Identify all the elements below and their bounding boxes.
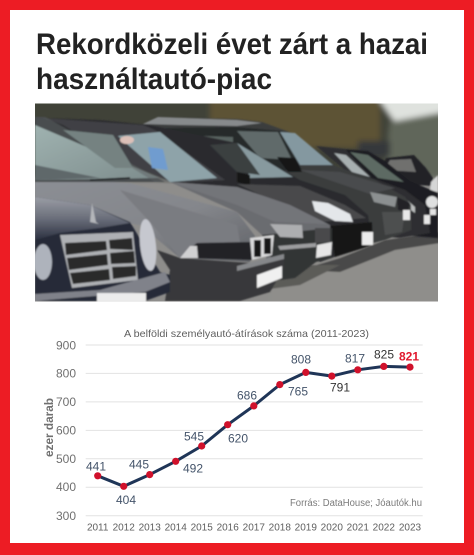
- third dark car: [143, 117, 411, 245]
- x axis labels: 2017: [243, 522, 265, 534]
- grey hatchback: [170, 182, 332, 280]
- data labels: 686: [237, 388, 257, 402]
- line chart: domestic used-car transfers 2011-2023: [42, 328, 423, 534]
- y axis labels: 300: [56, 509, 76, 523]
- data labels: [86, 348, 419, 507]
- photo: row of used cars: [30, 98, 450, 303]
- photo ground: gravel and shadows: [272, 232, 438, 289]
- data labels: 404: [116, 493, 136, 507]
- y axis labels: 500: [56, 452, 76, 466]
- x axis labels: 2013: [139, 522, 161, 534]
- x axis labels: 2021: [347, 522, 369, 534]
- data labels: 620: [228, 432, 248, 446]
- data labels: 791: [330, 380, 350, 394]
- y axis labels: [56, 338, 76, 523]
- y axis labels: 600: [56, 424, 76, 438]
- data labels: 441: [86, 460, 106, 474]
- x axis labels: 2012: [113, 522, 135, 534]
- data labels: 765: [288, 384, 308, 398]
- data labels: 825: [374, 348, 394, 362]
- x axis labels: 2014: [165, 522, 187, 534]
- data line: [98, 366, 410, 486]
- source note: Forrás: DataHouse; Jóautók.hu: [290, 498, 422, 509]
- x axis labels: 2019: [295, 522, 317, 534]
- y axis labels: 900: [56, 338, 76, 352]
- x axis labels: 2011: [87, 522, 109, 534]
- data points: [94, 363, 414, 490]
- data labels: 808: [291, 352, 311, 366]
- title: [36, 28, 428, 96]
- x axis labels: 2015: [191, 522, 213, 534]
- data labels: 817: [345, 352, 365, 366]
- title: Rekordközeli évet zárt a hazai: [36, 28, 428, 61]
- y axis labels: 800: [56, 366, 76, 380]
- chart title: A belföldi személyautó-átírások száma (2011-2023): [124, 328, 369, 340]
- y axis labels: 700: [56, 395, 76, 409]
- x axis labels: 2023: [399, 522, 422, 534]
- x axis labels: 2020: [321, 522, 343, 534]
- data labels: 545: [184, 430, 204, 444]
- Mercedes front: [34, 197, 170, 302]
- title: használtautó-piac: [36, 63, 272, 96]
- y axis labels: 400: [56, 480, 76, 494]
- big windshield of grey BMW: [35, 117, 225, 183]
- far car: [379, 155, 438, 192]
- x axis labels: 2022: [373, 522, 395, 534]
- y axis title: ezer darab: [42, 398, 56, 457]
- back right car: [340, 149, 438, 238]
- x axis labels: [87, 522, 422, 534]
- fourth car: [316, 146, 430, 238]
- grey BMW: [35, 178, 284, 301]
- photo background: trees and sky: [30, 98, 450, 180]
- data labels: 445: [129, 458, 149, 472]
- black car: [43, 118, 373, 262]
- x axis labels: 2018: [269, 522, 291, 534]
- x axis labels: 2016: [217, 522, 239, 534]
- data labels: 821: [399, 350, 419, 364]
- data labels: 492: [183, 462, 203, 476]
